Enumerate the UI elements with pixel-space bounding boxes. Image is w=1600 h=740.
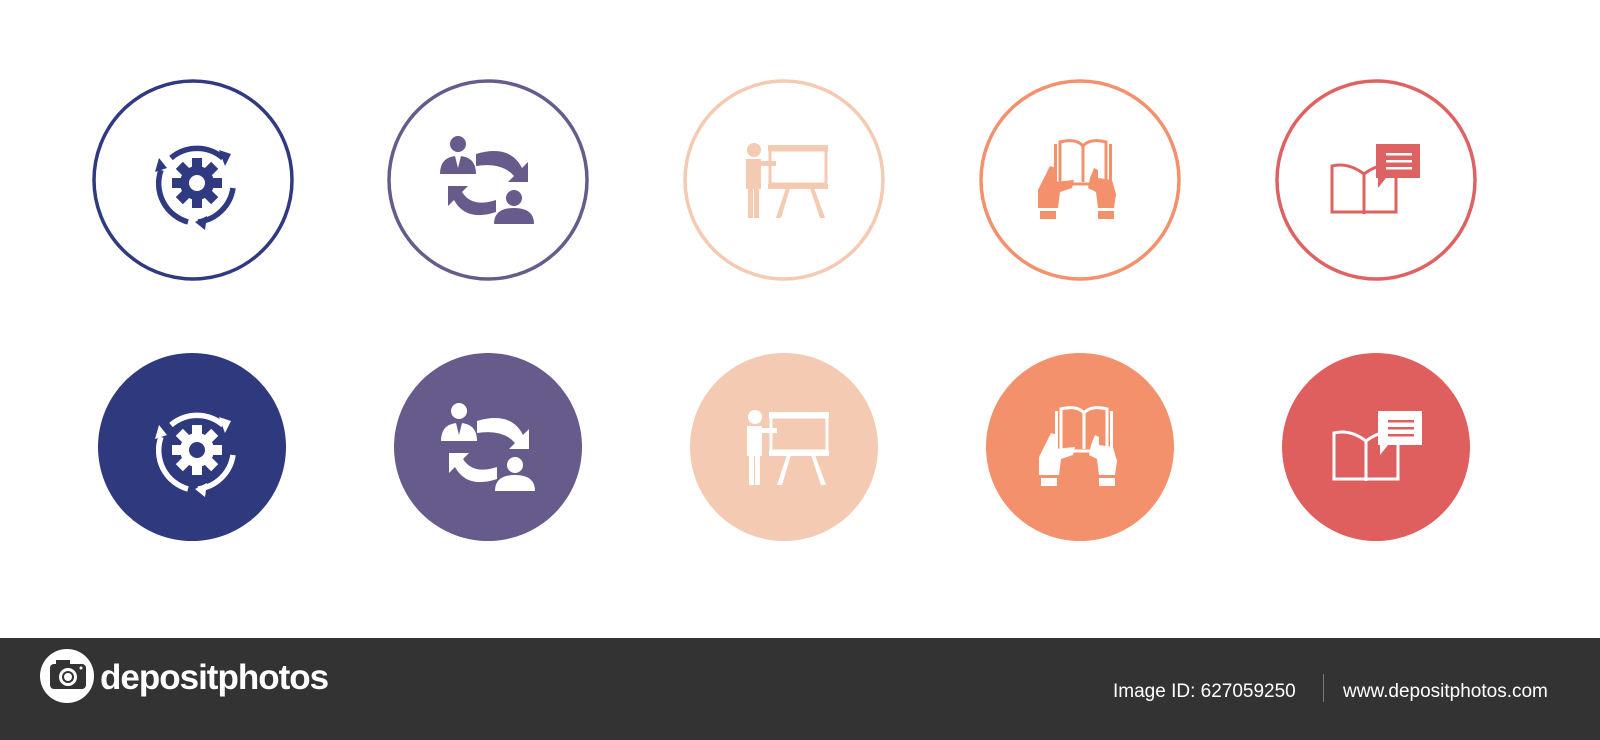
image id text: Image ID: 627059250 <box>1113 681 1296 702</box>
outline circle: reading hands <box>981 81 1179 279</box>
panel: outline row <box>94 81 1475 279</box>
outline circle: presentation <box>685 81 883 279</box>
icon: presentation outline <box>746 143 828 218</box>
icon: logo camera <box>40 649 94 703</box>
icon: hands book outline <box>1038 141 1116 219</box>
filled circle: hands <box>986 353 1174 541</box>
icon: book chat outline <box>1332 144 1420 214</box>
filled circle: presentation <box>690 353 878 541</box>
icon: hands filled <box>1039 408 1117 486</box>
filled circle: swap <box>394 353 582 541</box>
panel: filled row <box>98 353 1470 541</box>
filled circle: gear <box>98 353 286 541</box>
logo text: depositphotos <box>100 658 329 697</box>
website text: www.depositphotos.com <box>1342 681 1548 702</box>
icon: gear filled <box>155 415 233 497</box>
outline circle: book chat <box>1277 81 1475 279</box>
icon: swap filled <box>441 403 535 491</box>
outline circle: gear <box>94 81 292 279</box>
footer bar <box>0 638 1600 740</box>
icon: swap outline <box>440 136 534 224</box>
icon: book chat filled <box>1334 411 1422 481</box>
outline circle: swap <box>389 81 587 279</box>
icon: presentation filled <box>747 410 829 485</box>
filled circle: book chat <box>1282 353 1470 541</box>
icon: gear outline <box>155 148 233 230</box>
